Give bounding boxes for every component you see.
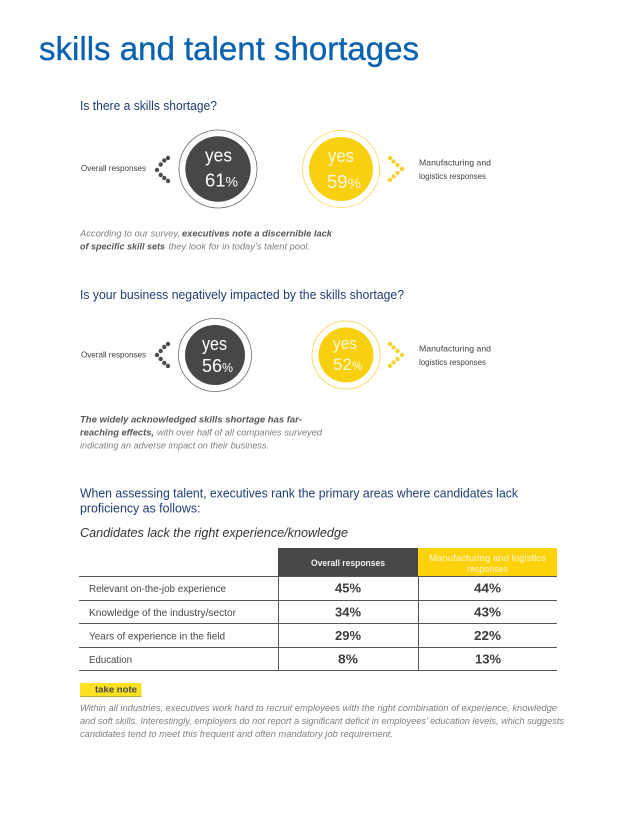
row: knowledge of the industry: 43%: [474, 604, 501, 620]
panel: is there a skills shortage: [79, 99, 491, 252]
subheading: candidates lack experience: Candidates lack the right experience/knowledge: [80, 526, 348, 540]
text block: impact note: indicating an adverse impact on their business.: [80, 440, 269, 452]
circle: manufacturing 52%: [312, 321, 380, 389]
label: manufacturing and logistics responses: logistics responses: [419, 171, 486, 181]
row: education: 8%: [338, 652, 358, 666]
label: overall responses: Overall responses: [81, 350, 146, 360]
row: relevant on-the-job experience: 45%: [335, 580, 361, 596]
callout: take note: take note: [95, 684, 137, 696]
label: overall responses: Overall responses: [81, 163, 146, 173]
row: relevant on-the-job experience: [89, 580, 501, 596]
row: knowledge of the industry: [89, 604, 501, 620]
text block: take note body: Within all industries, executives work hard to recruit employees with the right combination of experience, knowledge: [80, 703, 557, 714]
label: manufacturing and logistics responses: logistics responses: [419, 357, 486, 367]
circle: manufacturing 52%: yes: [333, 335, 357, 353]
circle: overall 56%: %: [222, 360, 233, 375]
header: overall responses: Overall responses: [311, 558, 385, 568]
icon: dotted arrow left: [155, 156, 170, 183]
callout: take note: [80, 683, 142, 697]
row: education: 13%: [475, 652, 501, 666]
title: skills and talent shortages: [39, 30, 419, 67]
row: education: [89, 652, 501, 666]
label: manufacturing and logistics responses: [419, 344, 491, 367]
row: relevant on-the-job experience: Relevant on-the-job experience: [89, 584, 226, 595]
circle: overall 61%: [179, 130, 257, 208]
circle: overall 61%: 61: [205, 170, 226, 190]
header: manufacturing and logistics responses: responses: [467, 564, 508, 574]
heading: Is your business negatively impacted by the skills shortage?: [80, 288, 404, 302]
heading: talent assessment: When assessing talent, executives rank the primary areas where candidates lack: [80, 486, 519, 500]
icon: dotted arrow right: [388, 342, 404, 368]
row: years of experience: 29%: [335, 628, 361, 643]
heading: Is there a skills shortage?: [80, 99, 217, 113]
heading: talent assessment: [80, 486, 519, 516]
header: manufacturing and logistics responses: [418, 548, 557, 576]
text block: impact note: with over half of all companies surveyed: [157, 428, 323, 438]
text block: impact note: [80, 414, 323, 452]
label: manufacturing and logistics responses: Manufacturing and: [419, 344, 491, 354]
circle: overall 61%: yes: [205, 144, 232, 166]
row: years of experience: [89, 628, 501, 643]
circle: manufacturing 59%: 59: [327, 171, 348, 192]
circle: manufacturing 52%: 52: [333, 356, 352, 374]
text block: take note body: and soft skills. Interestingly, employers do not report a significant deficit in employees’ education levels, which suggests: [80, 716, 564, 727]
label: manufacturing and logistics responses: Manufacturing and: [419, 158, 491, 168]
icon: dotted arrow right: [388, 156, 404, 182]
text block: take note body: candidates tend to meet this frequent and often mandatory job requirement.: [80, 729, 393, 740]
text block: take note body: [80, 703, 564, 740]
text block: survey note: According to our survey,: [79, 228, 180, 240]
header: manufacturing and logistics responses: Manufacturing and logistics: [429, 553, 547, 563]
text block: survey note: they look for in today’s talent pool.: [168, 242, 310, 252]
text block: survey note: executives note a discernible lack: [182, 228, 333, 240]
circle: manufacturing 59%: yes: [328, 145, 354, 166]
header: overall responses: [278, 548, 418, 576]
row: years of experience: 22%: [474, 628, 501, 643]
circle: overall 56%: yes: [202, 333, 227, 354]
icon: dotted arrow left: [155, 342, 170, 368]
circle: overall 61%: %: [226, 174, 238, 190]
row: knowledge of the industry: 34%: [335, 604, 361, 620]
text block: impact note: reaching effects,: [80, 428, 154, 438]
text block: impact note: The widely acknowledged skills shortage has far-: [80, 414, 302, 426]
circle: manufacturing 52%: %: [352, 359, 363, 373]
row: years of experience: Years of experience in the field: [89, 632, 225, 642]
circle: overall 56%: [178, 318, 252, 392]
row: knowledge of the industry: Knowledge of the industry/sector: [89, 608, 237, 619]
row: relevant on-the-job experience: 44%: [474, 580, 501, 596]
label: manufacturing and logistics responses: [419, 158, 491, 181]
heading: talent assessment: proficiency as follows:: [80, 502, 200, 516]
row: education: Education: [89, 655, 132, 666]
table: candidate proficiency: [79, 548, 557, 670]
text block: survey note: [79, 228, 333, 252]
circle: overall 56%: 56: [202, 355, 222, 376]
panel: negative business impact: [80, 288, 491, 452]
text block: survey note: of specific skill sets: [80, 242, 165, 252]
circle: manufacturing 59%: [302, 130, 380, 208]
circle: manufacturing 59%: %: [348, 175, 361, 191]
